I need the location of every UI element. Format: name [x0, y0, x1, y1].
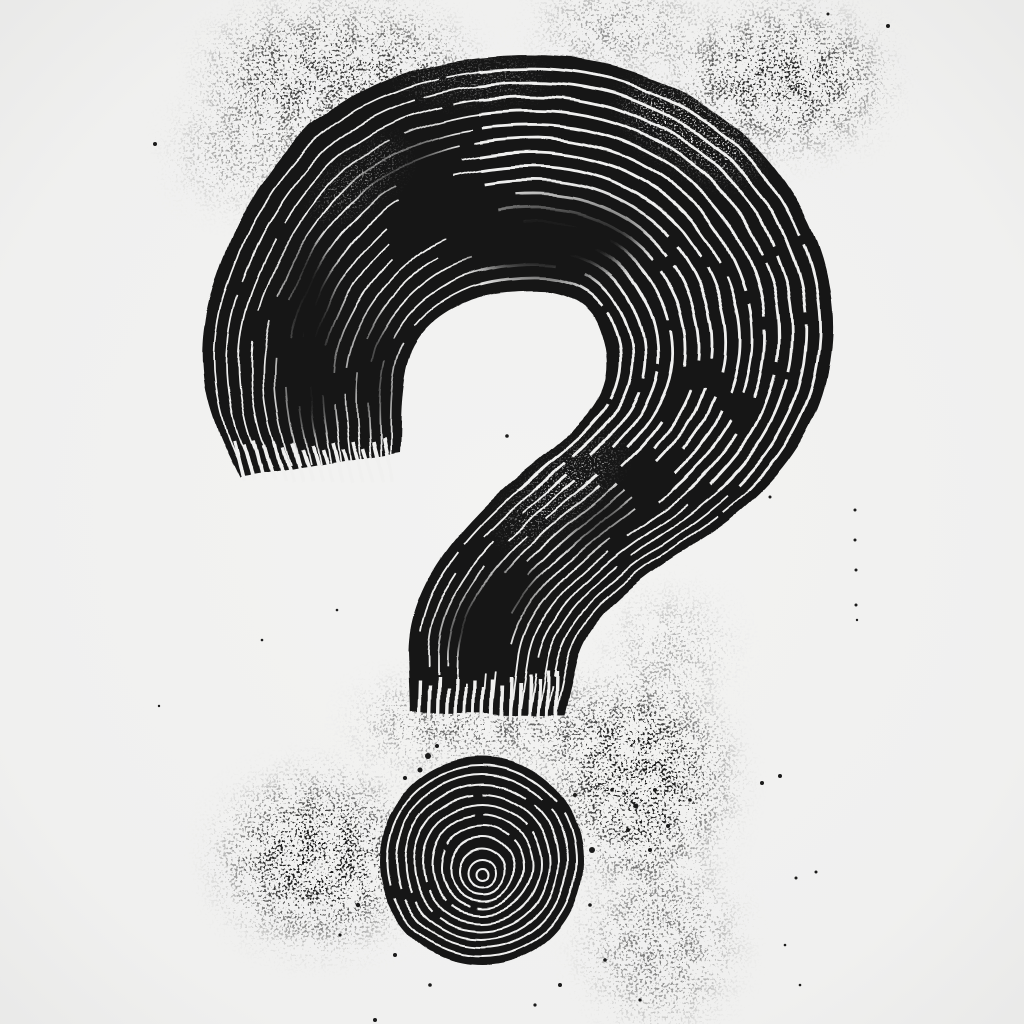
engraved lines: stem [418, 489, 750, 712]
torn notches: hook bottom [234, 436, 392, 482]
engraved lines [215, 69, 820, 715]
engraved lines: left side [212, 72, 482, 468]
torn notches: stem bottom [419, 672, 557, 718]
dot concentric rings [387, 766, 577, 956]
solid ink body [190, 40, 850, 730]
dot body [380, 757, 584, 965]
ink smudge clouds [166, 0, 902, 1024]
worn ink grit [308, 55, 773, 552]
question mark hook and stem [190, 40, 850, 730]
question mark dot [380, 757, 584, 965]
engraved lines: right side [478, 68, 822, 491]
scattered ink specks [153, 12, 890, 1022]
